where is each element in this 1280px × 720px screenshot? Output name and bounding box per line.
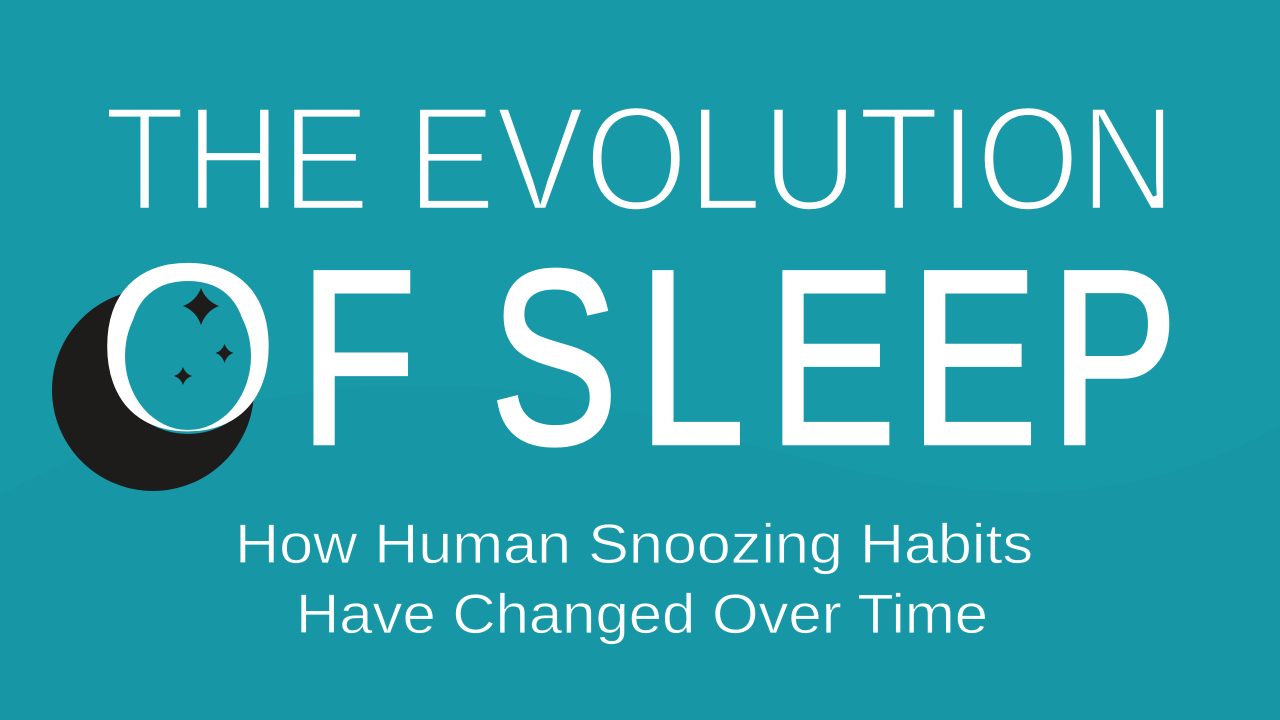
icon: right small star (216, 344, 234, 363)
subtitle: How Human Snoozing Habits (235, 512, 1033, 575)
letter O counter (125, 282, 251, 430)
title line 2: F SLEEP (300, 219, 1178, 496)
subtitle (235, 512, 1033, 645)
icon: left small star (174, 367, 192, 385)
subtitle: Have Changed Over Time (296, 582, 988, 645)
icon: stars (174, 288, 234, 385)
icon: large star (183, 288, 219, 325)
title line 1: THE EVOLUTION (104, 75, 1176, 242)
icon: crescent moon (52, 266, 268, 491)
title line 2: O (96, 215, 280, 480)
